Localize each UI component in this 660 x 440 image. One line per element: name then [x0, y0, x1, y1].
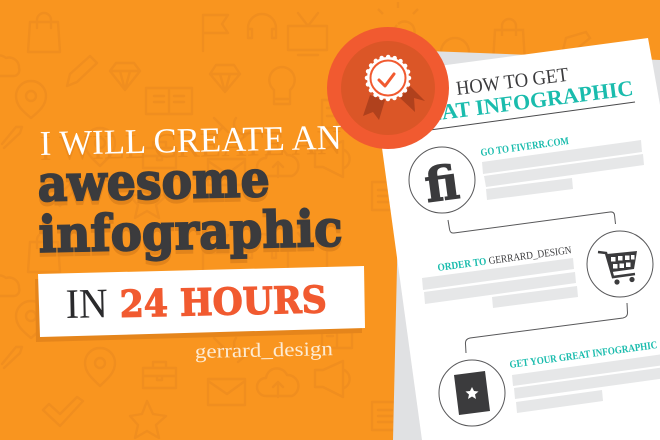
front sheet: [372, 38, 660, 440]
connector 1: [448, 212, 616, 233]
step 1 icon: fiverr logo: fi: [421, 155, 463, 214]
author name: gerrard_design: [195, 338, 333, 363]
connector 2: [465, 303, 628, 353]
step 1 icon: fiverr logo: [409, 147, 475, 214]
headline: i will create an: I WILL CREATE AN: [39, 123, 342, 168]
headline: awesome: awesome: [37, 149, 270, 213]
back sheet: [393, 50, 660, 440]
step 3 text bars: [512, 353, 660, 413]
badge: [327, 27, 449, 149]
step 1 title: GO TO FIVERR.COM: [480, 136, 570, 159]
headline: i will create an: I WILL CREATE AN: [39, 118, 342, 163]
heading rule: [430, 102, 635, 130]
seal: [367, 57, 409, 99]
step 2 text bars: [422, 258, 578, 308]
sheet heading: great infographic: GREAT INFOGRAPHIC: [393, 75, 635, 131]
ribbons: [363, 86, 425, 120]
step 2 icon: cart: [587, 231, 653, 297]
headline: infographic: infographic: [38, 203, 343, 268]
step 1 text bars: [482, 140, 644, 200]
headline: awesome: awesome: [37, 153, 270, 217]
sheet heading: how to get: HOW TO GET: [455, 64, 570, 100]
step 3 icon: infographic sheet: [439, 360, 505, 426]
banner text: in: IN: [65, 281, 108, 328]
banner text: 24 hours: 24 HOURS: [119, 277, 327, 326]
step 2 title: ORDER TO GERRARD_DESIGN: [437, 245, 573, 274]
banner: [35, 266, 365, 342]
headline: infographic: infographic: [38, 199, 343, 264]
